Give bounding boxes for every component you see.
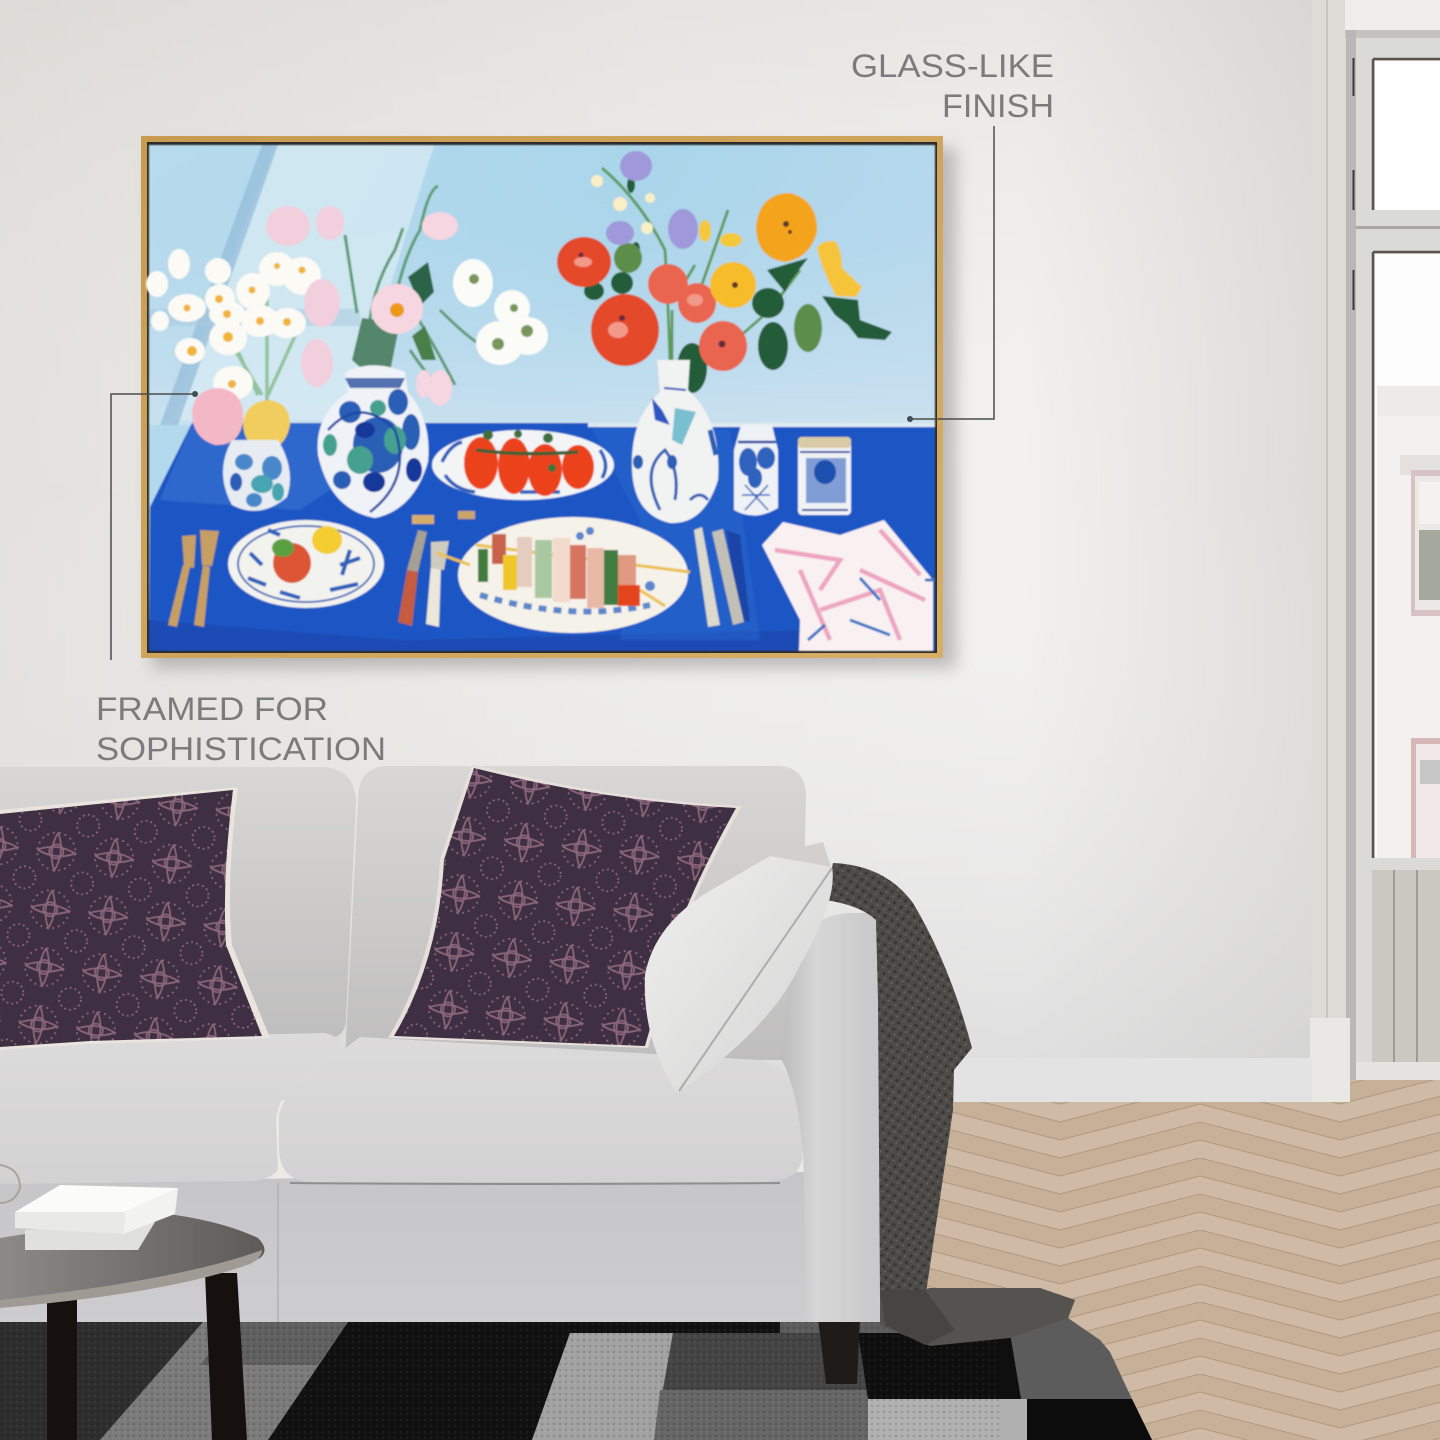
sofa leg [818, 1318, 860, 1384]
sofa right arm [782, 913, 880, 1322]
small blue jar [734, 425, 778, 516]
knives right [694, 527, 750, 627]
knit throw on floor [880, 1288, 1075, 1346]
glass [0, 1165, 20, 1203]
painting canvas [146, 145, 935, 651]
white pillow [645, 842, 833, 1093]
callout label second line: SOPHISTICATION [96, 731, 386, 767]
small left vase [223, 440, 290, 511]
left small plate [228, 520, 384, 608]
purple pillow left [0, 787, 270, 1050]
leader dot [192, 391, 198, 397]
door lower wood panel [1356, 870, 1440, 1080]
back cushion right [345, 766, 806, 1060]
stack of books [15, 1185, 178, 1250]
sofa base [0, 1172, 806, 1322]
blue tablecloth [149, 423, 935, 651]
coffee table with books [0, 1165, 265, 1440]
white and blue vase with flowers [632, 360, 718, 523]
callout label: FRAMED FOR [96, 691, 328, 727]
table legs [47, 1273, 247, 1440]
leader line [111, 394, 194, 660]
framed artwork [141, 136, 956, 668]
striped rug [0, 1288, 1152, 1440]
seat cushion left [0, 1033, 340, 1184]
left flower bouquet [146, 206, 344, 450]
callout: glass-like finish [851, 48, 1054, 422]
wall [0, 0, 1312, 1100]
door hinges [1352, 58, 1354, 310]
right bouquet [557, 151, 892, 393]
window lower pane with building view [1375, 254, 1440, 858]
marble table top [0, 1213, 265, 1307]
pink napkin [762, 520, 935, 651]
skewer platter [437, 517, 690, 633]
leader dot [907, 416, 913, 422]
blue patterned cup [798, 437, 851, 515]
window upper pane [1375, 61, 1440, 210]
seat cushion right [279, 1037, 804, 1182]
leader line [911, 126, 994, 419]
knit throw blanket [825, 863, 972, 1345]
baseboard [950, 1058, 1312, 1102]
middle bouquet [345, 186, 548, 406]
callout label second line: FINISH [942, 88, 1054, 124]
sofa [0, 764, 1075, 1384]
frame shadow [152, 148, 956, 668]
callout label: GLASS-LIKE [851, 48, 1054, 84]
forks left [168, 530, 219, 627]
purple pillow centre [388, 764, 742, 1048]
callout: framed for sophistication [96, 391, 386, 767]
tomato platter [432, 430, 614, 500]
herringbone wood floor [880, 1080, 1440, 1440]
large blue and white vase [318, 365, 429, 518]
back cushion left [0, 767, 356, 1040]
window and door frame [1310, 0, 1440, 1102]
gold frame [141, 136, 943, 658]
knife and fork centre [398, 511, 475, 627]
